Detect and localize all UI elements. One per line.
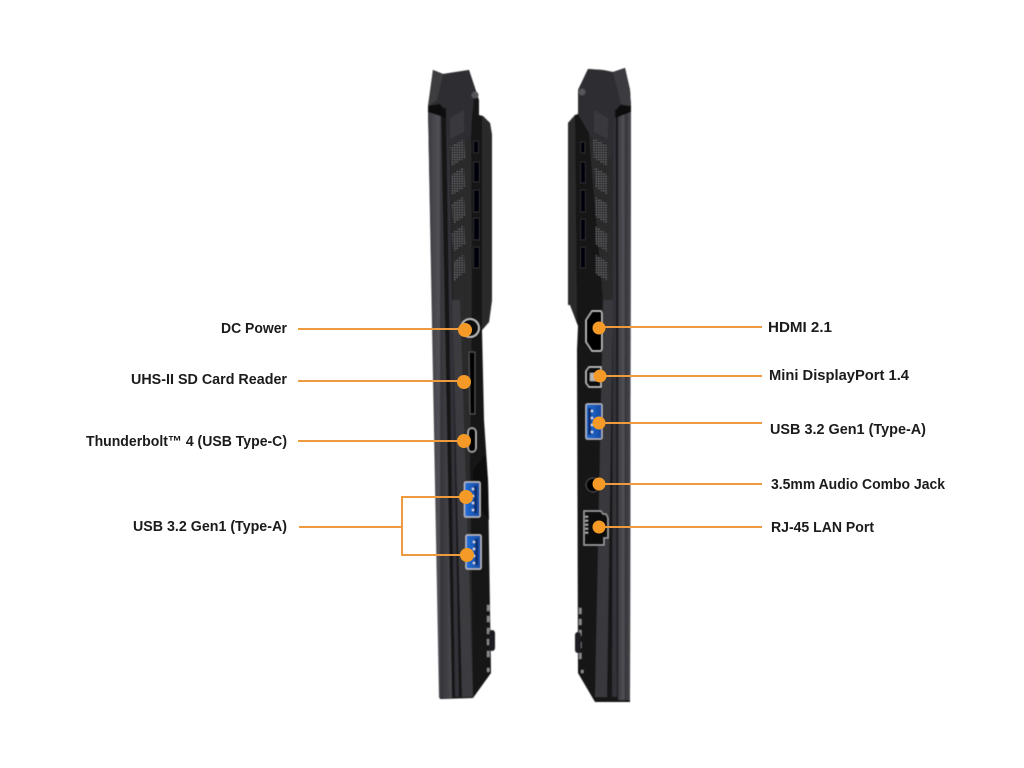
callout: UHS-II SD Card Reader	[131, 372, 471, 389]
left upper side slots	[474, 141, 480, 268]
left laptop side view	[428, 70, 495, 699]
callout: 3.5mm Audio Combo Jack: 3.5mm Audio Combo Jack	[771, 477, 946, 493]
right body panel	[588, 110, 613, 300]
left recessed panel	[450, 110, 464, 139]
right rubber bump	[575, 632, 581, 653]
USB-A port right	[586, 404, 602, 439]
Thunderbolt port	[468, 428, 476, 452]
callout: RJ-45 LAN Port: RJ-45 LAN Port	[771, 520, 874, 536]
right top facet	[613, 68, 631, 106]
right lower buttons	[579, 608, 584, 673]
audio jack	[586, 478, 600, 492]
right laptop side view	[568, 68, 631, 702]
HDMI port	[586, 311, 602, 351]
callout: Thunderbolt 4	[86, 434, 471, 450]
callout: HDMI 2.1	[592, 320, 832, 336]
left thin band	[446, 110, 459, 697]
callout: USB 3.2 Gen1 left with bracket: USB 3.2 Gen1 (Type-A)	[133, 519, 287, 535]
callout: USB 3.2 Gen1 left with bracket	[133, 490, 474, 562]
left top facet	[428, 70, 443, 106]
right upper side slots	[580, 142, 586, 268]
left body panel	[449, 110, 473, 697]
left hinge screw	[472, 92, 478, 98]
left lid strip	[428, 110, 452, 698]
callout: DC Power	[221, 321, 472, 337]
callout: USB 3.2 Gen1 right: USB 3.2 Gen1 (Type-A)	[770, 422, 926, 438]
DC power port ring	[461, 319, 479, 337]
callout: UHS-II SD Card Reader: UHS-II SD Card Reader	[131, 372, 287, 388]
left inner light band	[452, 300, 473, 697]
right laptop body silhouette	[568, 68, 631, 702]
left bump edge panel	[482, 116, 492, 330]
left laptop body silhouette	[428, 70, 492, 699]
right hinge screw	[578, 88, 586, 96]
callout: DC Power: DC Power	[221, 321, 287, 337]
right inner light band	[595, 300, 613, 697]
left rubber bump	[489, 630, 495, 651]
RJ-45 port	[584, 511, 608, 545]
right bump edge panel	[568, 115, 577, 322]
left lower buttons	[487, 605, 490, 672]
SD card slot	[469, 352, 475, 414]
USB-A port upper	[464, 482, 480, 517]
callout: USB 3.2 Gen1 right	[592, 416, 926, 438]
left cooling vents	[450, 139, 465, 281]
Mini DisplayPort	[586, 367, 601, 387]
left chevron	[473, 455, 489, 520]
callout: Thunderbolt 4: Thunderbolt™ 4 (USB Type-C)	[86, 434, 287, 450]
callout: RJ-45 LAN Port	[592, 520, 874, 536]
left hinge notch	[428, 104, 446, 118]
USB-A port lower	[466, 535, 481, 569]
callout: 3.5mm Audio Combo Jack	[592, 477, 946, 493]
left hinge top cap	[428, 70, 475, 160]
right hinge notch	[615, 105, 631, 118]
callout: HDMI 2.1: HDMI 2.1	[768, 320, 832, 336]
right recessed panel	[594, 110, 608, 139]
right lid strip	[618, 112, 631, 700]
right cooling vents	[593, 138, 608, 281]
callout: Mini DisplayPort 1.4	[594, 368, 909, 384]
right hinge top cap	[578, 68, 631, 160]
callout: Mini DisplayPort 1.4: Mini DisplayPort 1.4	[769, 368, 909, 384]
right thin band	[612, 112, 617, 697]
